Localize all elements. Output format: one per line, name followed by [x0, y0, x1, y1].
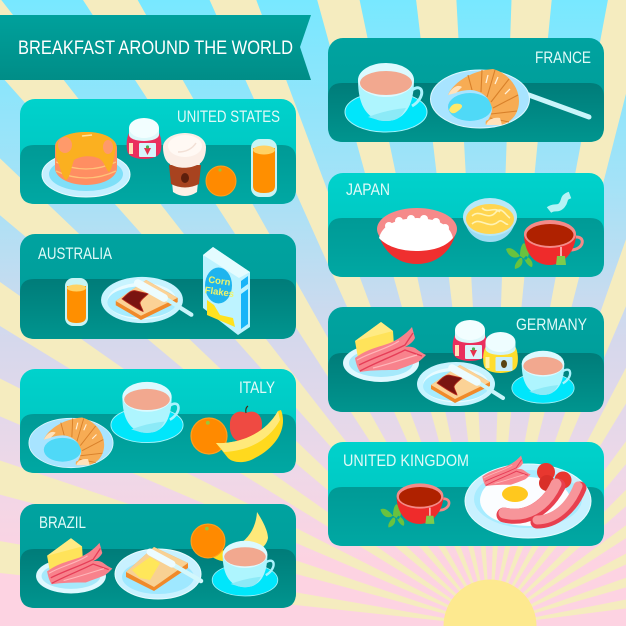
icon: rice bowl	[377, 208, 457, 264]
title: BREAKFAST AROUND THE WORLD	[18, 38, 293, 59]
icon: jam jar	[127, 118, 161, 159]
label: Brazil: BRAZIL	[39, 513, 86, 532]
label: Australia: AUSTRALIA	[38, 244, 113, 263]
panel: Japan	[328, 173, 604, 277]
icon: fruit	[191, 406, 283, 462]
icon: full breakfast plate	[465, 456, 591, 538]
icon: cheese and bacon	[343, 322, 426, 382]
icon: jam jar	[453, 320, 487, 361]
icon: pancakes	[42, 132, 130, 197]
panel: Italy	[20, 369, 296, 473]
icon: croissant on plate	[430, 69, 530, 128]
panel: Brazil	[20, 504, 296, 608]
title banner	[0, 15, 311, 80]
icon: cheese and bacon	[36, 538, 112, 593]
icon: toast with jam	[101, 277, 191, 323]
icon: honey jar	[483, 332, 518, 373]
icon: coffee cup	[163, 133, 206, 196]
label: Germany: GERMANY	[516, 315, 587, 334]
icon: red tea cup	[506, 220, 582, 269]
icon: sun	[444, 580, 536, 626]
box lettering: Corn	[208, 275, 231, 289]
icon: noodle bowl	[463, 198, 517, 242]
icon: teacup	[345, 63, 427, 132]
icon: croissant on plate	[29, 418, 113, 468]
icon: teacup	[512, 351, 574, 403]
icon: orange	[206, 166, 236, 196]
panel: United Kingdom	[328, 442, 604, 546]
icon: knife	[526, 94, 589, 117]
icon: buttered toast	[115, 547, 201, 599]
icon: teacup	[212, 541, 278, 596]
panel: United States	[20, 99, 296, 204]
icon: corn flakes box	[203, 247, 250, 335]
icon: steam	[549, 195, 570, 210]
icon: corn flakes box: Flakes	[204, 285, 235, 300]
icon: fruit	[191, 512, 268, 562]
icon: teacup	[111, 382, 183, 443]
icon: toast with jam	[417, 362, 503, 406]
label: Japan: JAPAN	[346, 180, 390, 199]
panel: Australia	[20, 234, 296, 339]
label: United Kingdom: UNITED KINGDOM	[343, 451, 469, 470]
label: Italy: ITALY	[239, 378, 275, 397]
panel: France	[328, 38, 604, 142]
icon: red tea cup	[380, 483, 449, 528]
label: France: FRANCE	[535, 48, 591, 67]
panel: Germany	[328, 307, 604, 412]
label: United States: UNITED STATES	[177, 107, 280, 126]
icon: orange juice	[65, 278, 88, 326]
icon: orange juice	[251, 139, 277, 197]
